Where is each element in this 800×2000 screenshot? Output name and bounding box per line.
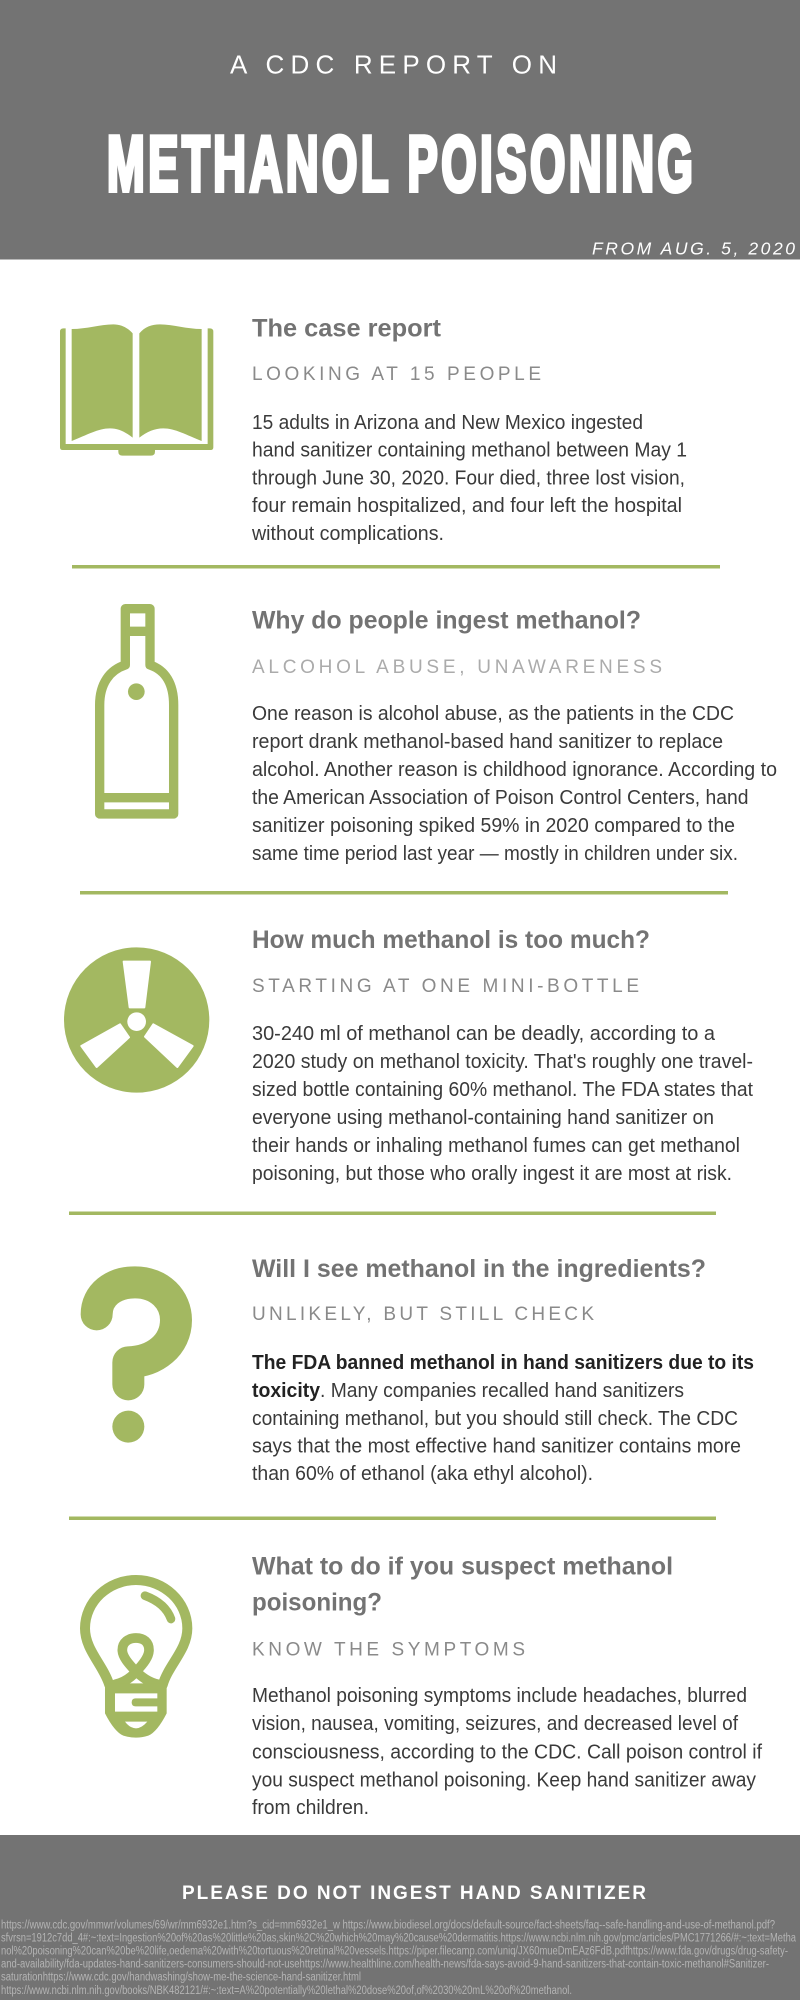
footer band bbox=[0, 1835, 800, 2000]
subheading: LOOKING AT 15 PEOPLE bbox=[252, 364, 541, 385]
body text: Methanol poisoning symptoms include headaches, blurred bbox=[252, 1685, 747, 1707]
body text bbox=[251, 412, 687, 545]
body text: same time period last year — mostly in children under six. bbox=[252, 843, 738, 865]
icon: open book bbox=[60, 324, 213, 456]
body text: containing methanol, but you should still check. The CDC bbox=[252, 1408, 738, 1430]
body text: toxicity bbox=[252, 1380, 321, 1402]
body text: everyone using methanol-containing hand sanitizer on bbox=[252, 1107, 714, 1129]
panel: the case report bbox=[60, 314, 687, 545]
body text: from children. bbox=[252, 1797, 369, 1819]
heading: What to do if you suspect methanol bbox=[252, 1552, 673, 1580]
heading: The case report bbox=[252, 314, 442, 342]
body text: alcohol. Another reason is childhood ignorance. According to bbox=[252, 759, 777, 781]
body text: through June 30, 2020. Four died, three lost vision, bbox=[252, 468, 685, 490]
body text: you suspect methanol poisoning. Keep hand sanitizer away bbox=[252, 1770, 756, 1792]
body text bbox=[252, 1352, 754, 1485]
body text: . Many companies recalled hand sanitizers bbox=[320, 1380, 684, 1402]
header kicker: A CDC REPORT ON bbox=[230, 50, 557, 80]
heading: poisoning? bbox=[252, 1588, 382, 1616]
body text: sized bottle containing 60% methanol. The FDA states that bbox=[252, 1079, 753, 1101]
icon: question mark bbox=[97, 1282, 176, 1443]
source list: https://www.ncbi.nlm.nih.gov/books/NBK482121/#:~:text=A%20potentially%20lethal%20dose%20of,of%2030%20mL%20of%20methanol. bbox=[1, 1985, 572, 1997]
body text: 30-240 ml of methanol can be deadly, according to a bbox=[252, 1023, 716, 1045]
body text: 2020 study on methanol toxicity. That's roughly one travel- bbox=[252, 1051, 753, 1073]
subheading: STARTING AT ONE MINI-BOTTLE bbox=[252, 976, 639, 997]
body text: four remain hospitalized, and four left the hospital bbox=[252, 495, 682, 517]
body text: says that the most effective hand sanitizer contains more bbox=[252, 1436, 741, 1458]
footer message: PLEASE DO NOT INGEST HAND SANITIZER bbox=[182, 1883, 646, 1904]
body text: hand sanitizer containing methanol between May 1 bbox=[252, 440, 687, 462]
body text: report drank methanol-based hand sanitizer to replace bbox=[252, 731, 723, 753]
subheading: UNLIKELY, BUT STILL CHECK bbox=[252, 1304, 594, 1325]
icon: light bulb bbox=[85, 1580, 187, 1738]
body text bbox=[252, 1685, 762, 1819]
subheading: ALCOHOL ABUSE, UNAWARENESS bbox=[252, 657, 662, 678]
panel: how much is too much bbox=[64, 926, 753, 1185]
heading: Why do people ingest methanol? bbox=[252, 606, 641, 634]
header band bbox=[0, 0, 800, 260]
panel: why people ingest methanol bbox=[100, 606, 777, 865]
body text: sanitizer poisoning spiked 59% in 2020 compared to the bbox=[252, 815, 735, 837]
body text: poisoning, but those who orally ingest it are most at risk. bbox=[252, 1163, 732, 1185]
body text bbox=[252, 703, 777, 865]
body text bbox=[252, 1023, 753, 1185]
report date: FROM AUG. 5, 2020 bbox=[592, 238, 795, 258]
body text: One reason is alcohol abuse, as the patients in the CDC bbox=[252, 703, 734, 725]
body text: The FDA banned methanol in hand sanitizers due to its bbox=[252, 1352, 754, 1374]
heading: How much methanol is too much? bbox=[252, 926, 650, 954]
body text: the American Association of Poison Control Centers, hand bbox=[252, 787, 748, 809]
heading: Will I see methanol in the ingredients? bbox=[252, 1255, 706, 1283]
body text: without complications. bbox=[251, 523, 444, 545]
body text: consciousness, according to the CDC. Call poison control if bbox=[252, 1742, 762, 1764]
subheading: KNOW THE SYMPTOMS bbox=[252, 1640, 525, 1660]
body text: their hands or inhaling methanol fumes can get methanol bbox=[252, 1135, 740, 1157]
panel: what to do bbox=[85, 1552, 762, 1819]
source list: saturationhttps://www.cdc.gov/handwashing/show-me-the-science-hand-sanitizer.html bbox=[1, 1972, 361, 1984]
source list bbox=[1, 1920, 796, 1997]
body text: than 60% of ethanol (aka ethyl alcohol). bbox=[252, 1463, 593, 1485]
panel: methanol in the ingredients bbox=[97, 1255, 754, 1485]
body text: vision, nausea, vomiting, seizures, and decreased level of bbox=[252, 1713, 738, 1735]
title: METHANOL POISONING bbox=[107, 120, 693, 208]
body text: 15 adults in Arizona and New Mexico ingested bbox=[252, 412, 643, 434]
icon: bottle bbox=[100, 609, 174, 814]
heading bbox=[252, 1552, 673, 1616]
icon: hazard circle bbox=[64, 947, 209, 1093]
